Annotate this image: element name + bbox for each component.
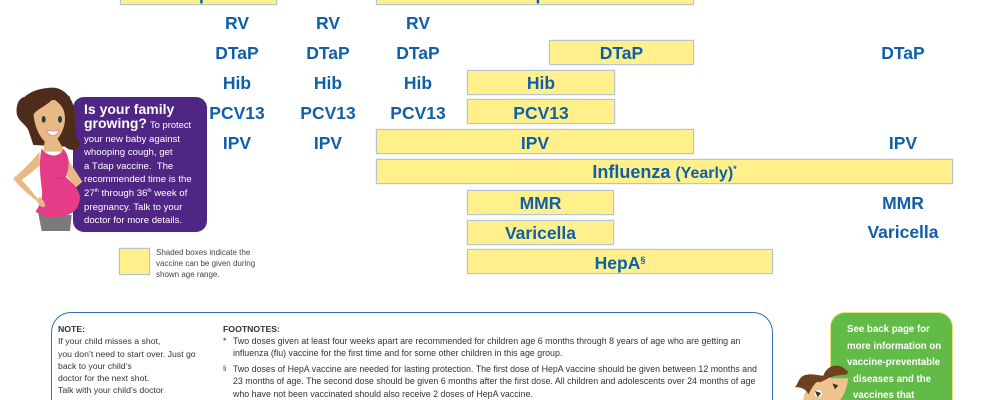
footnote: influenza: Two doses given at least four weeks apart are recommended for children age 6 months through 8 years of age who are getting an (233, 336, 740, 346)
icon: pregnant woman (13, 88, 82, 231)
footnote: HepA: 23 months of age. The second dose should be given 6 months after the first dose. All children and adolescents over 24 months of age (233, 376, 755, 386)
note text: Talk with your child’s doctor (58, 385, 164, 395)
bar: Hib (467, 70, 615, 95)
label: RV 4 months: RV (316, 13, 340, 33)
label: RV 6 months: RV (406, 13, 430, 33)
legend text (156, 248, 255, 279)
label: Hib 2 months: Hib (223, 73, 251, 93)
icon: girl character (795, 366, 848, 400)
label: IPV 4 months: IPV (314, 133, 342, 153)
bar: Influenza: Influenza (Yearly)* (592, 162, 737, 182)
footnote: HepA (223, 364, 757, 399)
label: Varicella 4-6 years: Varicella (867, 222, 939, 242)
label: PCV13 2 months: PCV13 (209, 103, 265, 123)
callout body text: 27th through 36th week of (84, 188, 187, 199)
note text: NOTE: (58, 324, 85, 334)
note text: If your child misses a shot, (58, 336, 160, 346)
label: Hib 6 months: Hib (404, 73, 432, 93)
footnote: influenza: * (223, 336, 226, 346)
label: DTaP 4 months: DTaP (306, 43, 350, 63)
bar: HepA: HepA§ (595, 253, 645, 273)
note text: doctor for the next shot. (58, 373, 149, 383)
label: DTaP 4-6 years: DTaP (881, 43, 925, 63)
bar: IPV: IPV (521, 133, 549, 153)
label: PCV13 4 months: PCV13 (300, 103, 356, 123)
note text (58, 324, 196, 400)
footnotes heading: FOOTNOTES: (223, 324, 280, 334)
footnote: influenza (223, 336, 740, 358)
green panel text: more information on (847, 340, 941, 352)
bar: IPV (376, 129, 694, 154)
note text: you don’t need to start over. Just go (58, 349, 196, 359)
bar: PCV13 (467, 99, 615, 124)
label: IPV 4-6 years: IPV (889, 133, 917, 153)
bar: HepB birth range (120, 0, 277, 5)
label: PCV13 6 months: PCV13 (390, 103, 446, 123)
green panel text: diseases and the (853, 374, 931, 384)
bar: HepB infant range (376, 0, 694, 5)
footnote: influenza: influenza (flu) vaccine for the first time and for some other children in this age group. (233, 348, 562, 358)
label: IPV 2 months: IPV (223, 133, 251, 153)
green panel text: vaccine-preventable (847, 357, 940, 368)
bar: Hib: Hib (527, 73, 555, 93)
bar: PCV13: PCV13 (513, 103, 569, 123)
callout body text: pregnancy. Talk to your (84, 202, 182, 213)
bar: Varicella: Varicella (505, 223, 576, 243)
callout body text (84, 119, 192, 226)
label: DTaP 6 months: DTaP (396, 43, 440, 63)
bar: Varicella (467, 220, 614, 245)
footnote: HepA: who have not been vaccinated should also receive 2 doses of HepA vaccine. (233, 389, 533, 399)
bar: HepA (467, 249, 773, 274)
panel: notes and footnotes (51, 312, 773, 400)
bar: MMR: MMR (520, 193, 561, 213)
panel: green see back page (830, 312, 953, 400)
label: Hib 4 months: Hib (314, 73, 342, 93)
bar: MMR (467, 190, 614, 215)
callout body text: To protect (150, 119, 191, 130)
green panel text (847, 324, 941, 400)
legend: shaded box swatch (119, 248, 150, 275)
callout heading: growing? (84, 114, 147, 130)
callout body text: a Tdap vaccine. The (84, 161, 173, 172)
panel: family growing callout (73, 97, 207, 232)
note text: back to your child’s (58, 361, 132, 371)
callout body text: doctor for more details. (84, 215, 182, 226)
bar: Influenza (376, 159, 953, 184)
callout body text: your new baby against (84, 134, 180, 145)
legend text: shown age range. (156, 270, 220, 279)
bar: DTaP (549, 40, 694, 65)
callout body text: recommended time is the (84, 174, 192, 185)
legend text: vaccine can be given during (156, 259, 255, 268)
footnote: HepA: Two doses of HepA vaccine are needed for lasting protection. The first dose of HepA vaccine should be given between 12 months and (233, 364, 757, 374)
label: MMR 4-6 years: MMR (882, 193, 924, 213)
callout body text: whooping cough, get (84, 147, 173, 158)
label: RV 2 months: RV (225, 13, 249, 33)
bar: DTaP: DTaP (600, 43, 643, 63)
footnote: HepA: § (223, 366, 226, 372)
legend text: Shaded boxes indicate the (156, 248, 250, 257)
callout heading: Is your family (84, 101, 174, 117)
callout heading (84, 101, 174, 131)
label: DTaP 2 months: DTaP (215, 43, 259, 63)
green panel text: See back page for (847, 324, 930, 335)
